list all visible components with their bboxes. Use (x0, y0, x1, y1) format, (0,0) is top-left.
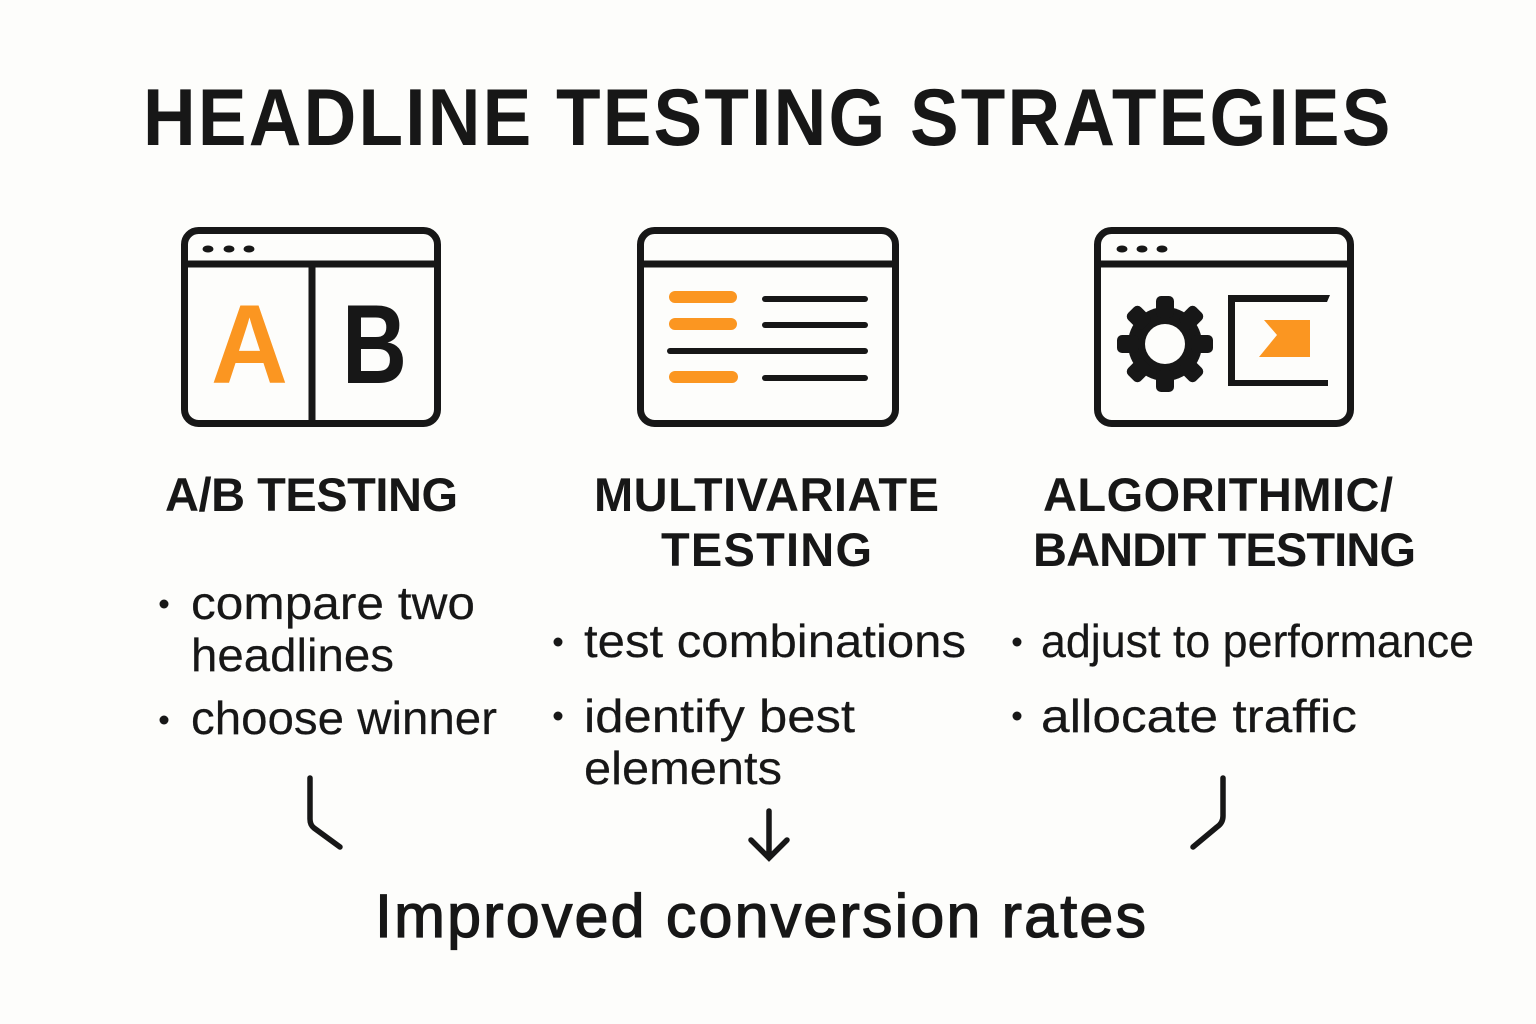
icon: gear (1117, 296, 1213, 392)
icon: bracket with orange flag (1228, 295, 1330, 386)
heading: multivariate testing: MULTIVARIATE (594, 468, 939, 521)
heading: multivariate testing (594, 468, 939, 576)
arrow: right connector (1193, 778, 1223, 847)
bullet list: algorithmic/bandit testing: adjust to performance (1041, 615, 1474, 667)
bullet list: A/B testing (160, 577, 497, 744)
arrow: center down (751, 811, 787, 858)
arrow: left connector (310, 778, 340, 847)
bullet list: algorithmic/bandit testing: allocate traffic (1041, 690, 1357, 742)
heading: algorithmic/bandit testing: ALGORITHMIC/ (1043, 468, 1393, 521)
icon: multivariate browser window (640, 230, 896, 424)
icon: algorithmic browser window (1098, 230, 1350, 424)
heading: algorithmic/bandit testing: BANDIT TESTING (1033, 523, 1416, 576)
bullet list: multivariate testing (554, 615, 966, 794)
bullet list: A/B testing: choose winner (191, 692, 497, 744)
heading: algorithmic/bandit testing (1033, 468, 1416, 576)
panel: multivariate testing (554, 230, 966, 858)
heading: A/B testing: A/B TESTING (165, 468, 458, 521)
icon: A/B browser window (184, 230, 438, 424)
panel: A/B testing (160, 230, 497, 847)
bullet list: A/B testing: compare two (191, 577, 475, 629)
bullet list: multivariate testing: test combinations (584, 615, 966, 667)
heading: multivariate testing: TESTING (661, 523, 872, 576)
outcome text: Improved conversion rates (375, 882, 1146, 950)
icon: A/B browser window: B (342, 282, 407, 407)
title: HEADLINE TESTING STRATEGIES (143, 72, 1390, 163)
bullet list: multivariate testing: identify best (584, 690, 855, 742)
bullet list: multivariate testing: elements (584, 742, 782, 794)
icon: A/B browser window: A (211, 282, 288, 407)
bullet list: algorithmic/bandit testing (1012, 615, 1474, 742)
panel: algorithmic/bandit testing (1012, 230, 1474, 847)
bullet list: A/B testing: headlines (191, 629, 394, 681)
